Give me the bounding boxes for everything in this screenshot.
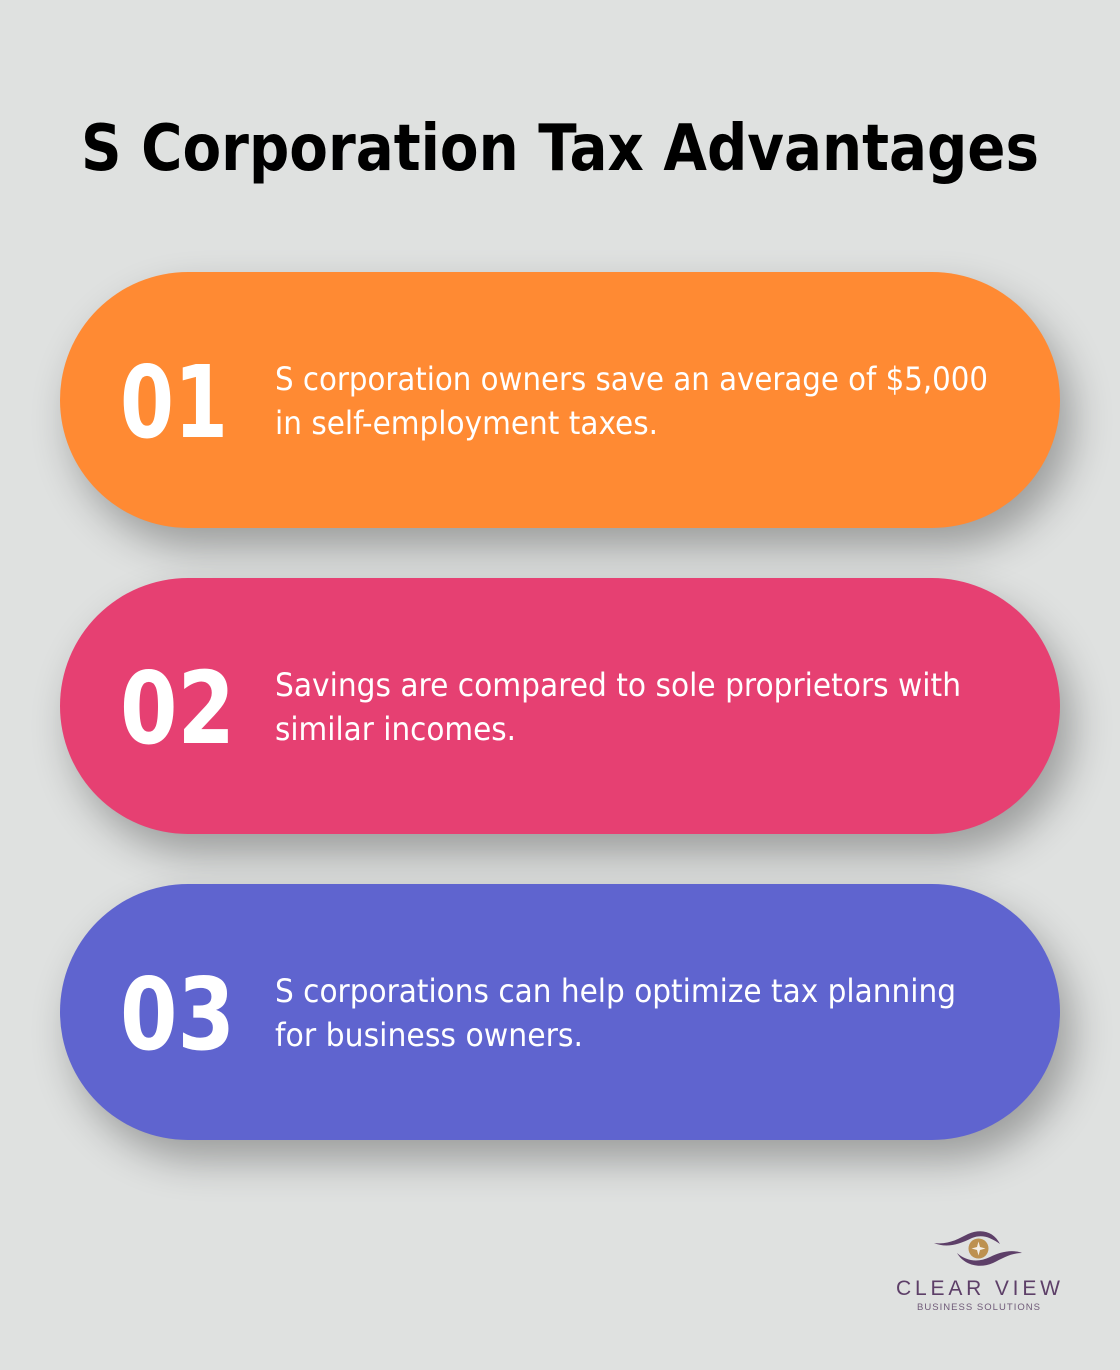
number 01: 01 <box>120 344 228 461</box>
panel: card 3 background <box>60 884 1060 1140</box>
panel: card 1 background <box>60 272 1060 528</box>
card 1 content <box>120 344 988 461</box>
card 3 text: for business owners. <box>275 1016 583 1054</box>
logo subtitle: BUSINESS SOLUTIONS <box>917 1302 1040 1313</box>
card 1 text: S corporation owners save an average of $5,000 <box>275 360 988 398</box>
card 2 text <box>275 666 961 748</box>
card 1 text <box>275 360 988 442</box>
panel: card 2 background <box>60 578 1060 834</box>
logo wordmark: CLEAR VIEW <box>896 1277 1060 1300</box>
card 3 text: S corporations can help optimize tax planning <box>275 972 956 1010</box>
icon: gold star circle <box>968 1238 988 1258</box>
card 3 content <box>120 956 956 1073</box>
card 3 text <box>275 972 956 1054</box>
logo: Clear View Business Solutions <box>896 1231 1060 1313</box>
card 2 text: similar incomes. <box>275 710 516 748</box>
number 03: 03 <box>120 956 235 1073</box>
icon: eye swooshes <box>934 1231 1022 1266</box>
card 1 text: in self-employment taxes. <box>275 404 658 442</box>
card 2 content <box>120 650 961 767</box>
card 2 text: Savings are compared to sole proprietors with <box>275 666 961 704</box>
number 02: 02 <box>120 650 235 767</box>
